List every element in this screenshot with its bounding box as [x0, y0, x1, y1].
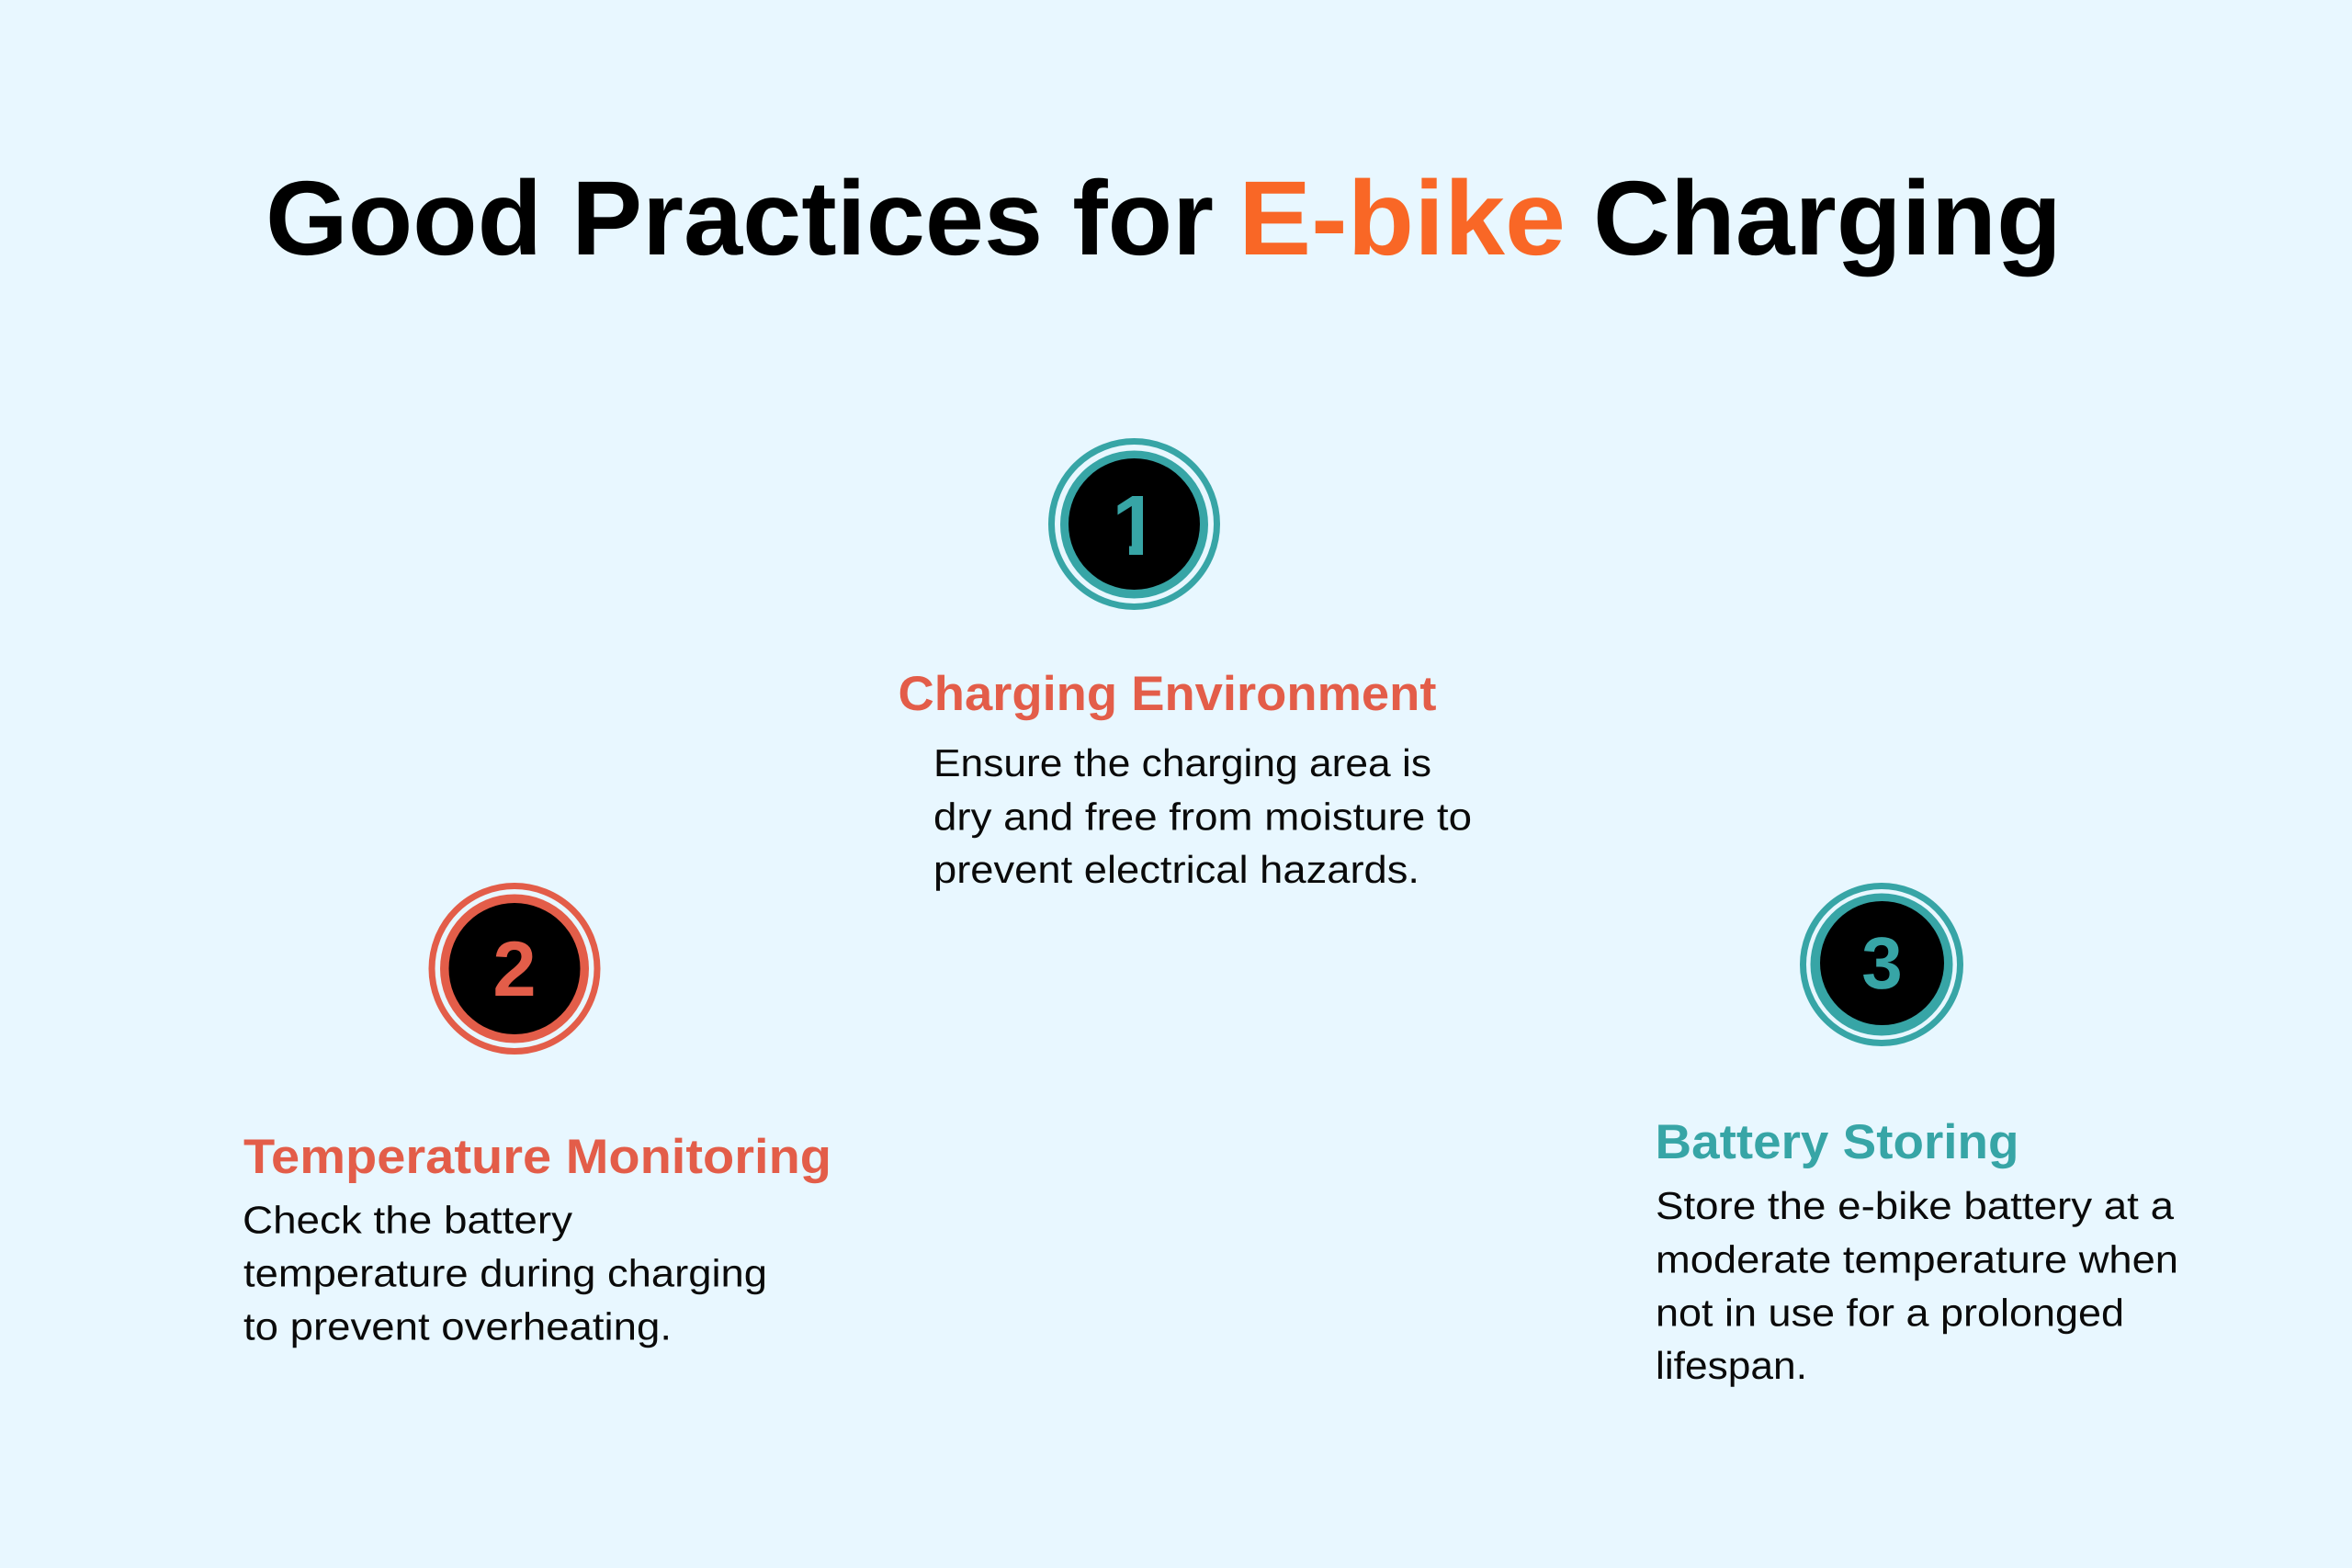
panel: temperature monitoring: [243, 886, 831, 1348]
text block: battery storing: lifespan.: [1656, 1344, 1807, 1387]
icon: number 1 badge: 1: [1112, 478, 1159, 573]
text block: charging environment: prevent electrical hazards.: [933, 848, 1419, 891]
icon: number 2 badge: [432, 886, 597, 1051]
text block: temperature monitoring: to prevent overheating.: [243, 1304, 672, 1348]
panel: battery storing: [1656, 886, 2178, 1387]
icon: number 3 badge: 3: [1861, 922, 1903, 1004]
icon: number 2 badge: 2: [492, 926, 537, 1013]
panel: charging environment: [899, 441, 1472, 891]
text block: battery storing: moderate temperature when: [1656, 1238, 2178, 1280]
text block: battery storing: not in use for a prolonged: [1656, 1292, 2124, 1334]
icon: number 3 badge: [1803, 886, 1961, 1043]
text block: charging environment: [933, 741, 1472, 891]
title: E-bike: [1238, 160, 1566, 277]
title: Charging: [1593, 160, 2062, 277]
text block: temperature monitoring: [243, 1198, 767, 1348]
heading: charging environment: Charging Environment: [899, 667, 1437, 721]
text block: battery storing: Store the e-bike battery at a: [1656, 1184, 2175, 1227]
heading: battery storing: Battery Storing: [1656, 1115, 2019, 1169]
text block: charging environment: dry and free from moisture to: [933, 795, 1472, 838]
text block: battery storing: [1656, 1184, 2178, 1387]
title: [266, 160, 2062, 277]
text block: temperature monitoring: Check the battery: [243, 1198, 572, 1242]
heading: temperature monitoring: Temperature Monitoring: [243, 1130, 831, 1184]
title: Good Practices for: [266, 160, 1214, 277]
text block: charging environment: Ensure the charging area is: [933, 741, 1431, 784]
text block: temperature monitoring: temperature during charging: [243, 1251, 767, 1295]
icon: number 1 badge: [1051, 441, 1216, 606]
